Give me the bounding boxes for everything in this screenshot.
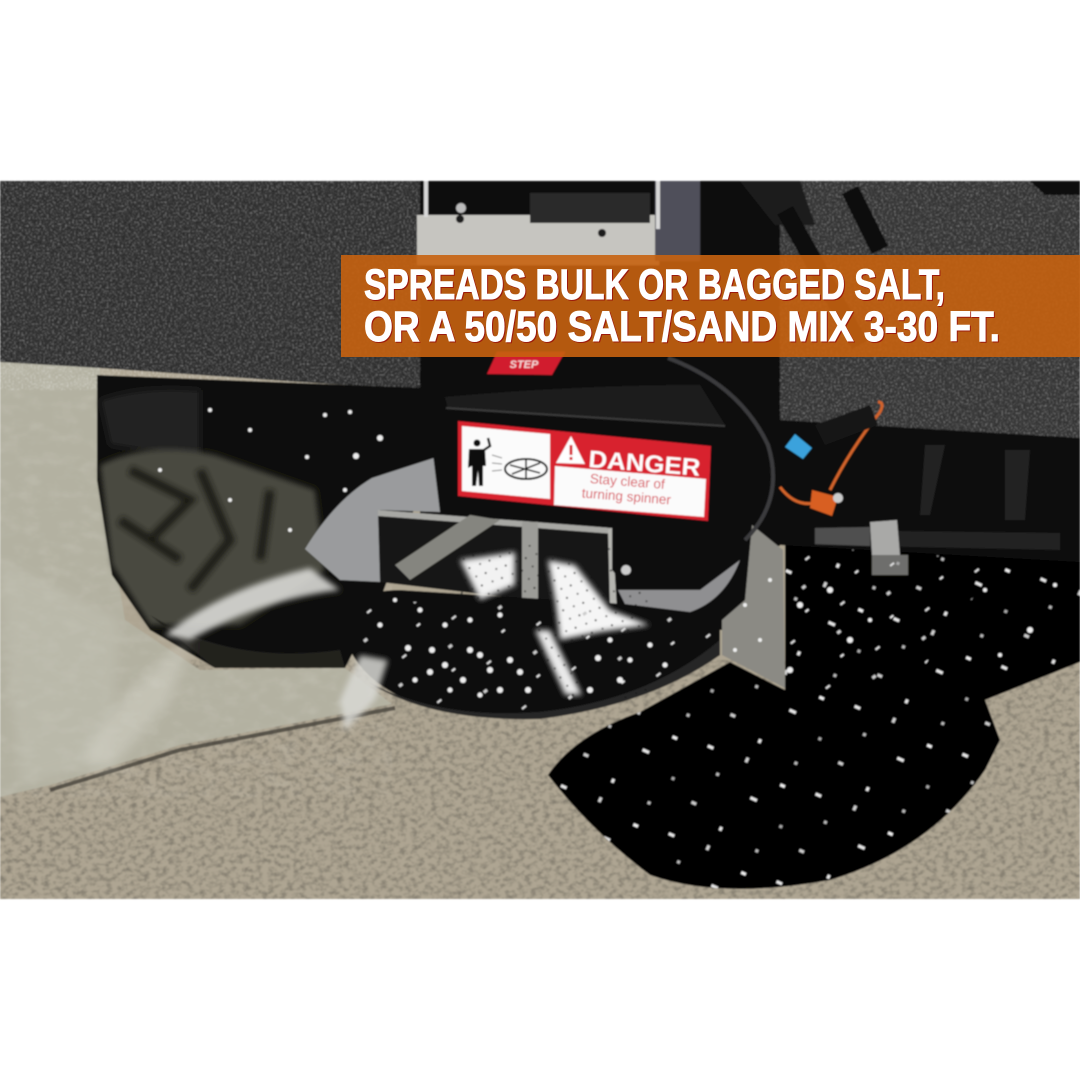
photo: no step sticker: STEP bbox=[510, 359, 539, 371]
photo: orange text banner bbox=[341, 255, 1080, 357]
photo scene softened bbox=[0, 181, 1080, 899]
photo: denser salt near spreader bbox=[362, 548, 981, 711]
photo: spreader body shadow on ground bbox=[548, 545, 1080, 889]
photo: spinner disc bbox=[340, 590, 720, 719]
photo: spreader mounted on ATV bbox=[0, 181, 1080, 899]
photo: truck bed left bbox=[0, 181, 425, 390]
photo: pale concrete slab bbox=[0, 362, 395, 797]
photo: steel mud flap bbox=[722, 525, 785, 688]
photo: dark frame and undercarriage bbox=[420, 181, 1080, 630]
photo: black cable bbox=[668, 358, 773, 540]
text: stay clear of turning spinner: turning spinner bbox=[581, 486, 672, 508]
photo: ATV tire bbox=[97, 375, 425, 668]
heading: banner text bbox=[364, 261, 1000, 351]
infographic canvas bbox=[0, 180, 1080, 900]
photo: spreader motor housing bbox=[430, 357, 750, 612]
photo: concrete ground bbox=[0, 181, 1080, 899]
photo: truck bed right bbox=[780, 181, 1080, 438]
photo: blue and orange connectors bbox=[780, 402, 882, 516]
photo: danger label bbox=[458, 421, 711, 521]
photo: salt spray streams bbox=[80, 545, 650, 770]
icon: person near spinner bbox=[468, 438, 547, 486]
photo: scattered salt in shadow bbox=[548, 545, 1080, 890]
photo: no step sticker bbox=[487, 352, 565, 375]
text: stay clear of turning spinner bbox=[581, 471, 672, 508]
photo: left wheel-side metal guard bbox=[305, 456, 617, 610]
photo: salt grains on disc and tire bbox=[158, 408, 1057, 698]
icon: warning triangle bbox=[556, 436, 585, 464]
text: banner line two: OR A 50/50 SALT/SAND MIX 3-30 FT. bbox=[364, 303, 1000, 351]
text: stay clear of turning spinner: Stay clear of bbox=[589, 471, 666, 492]
text: danger: DANGER bbox=[588, 446, 701, 482]
photo: upper metal hopper bracket bbox=[417, 181, 880, 345]
